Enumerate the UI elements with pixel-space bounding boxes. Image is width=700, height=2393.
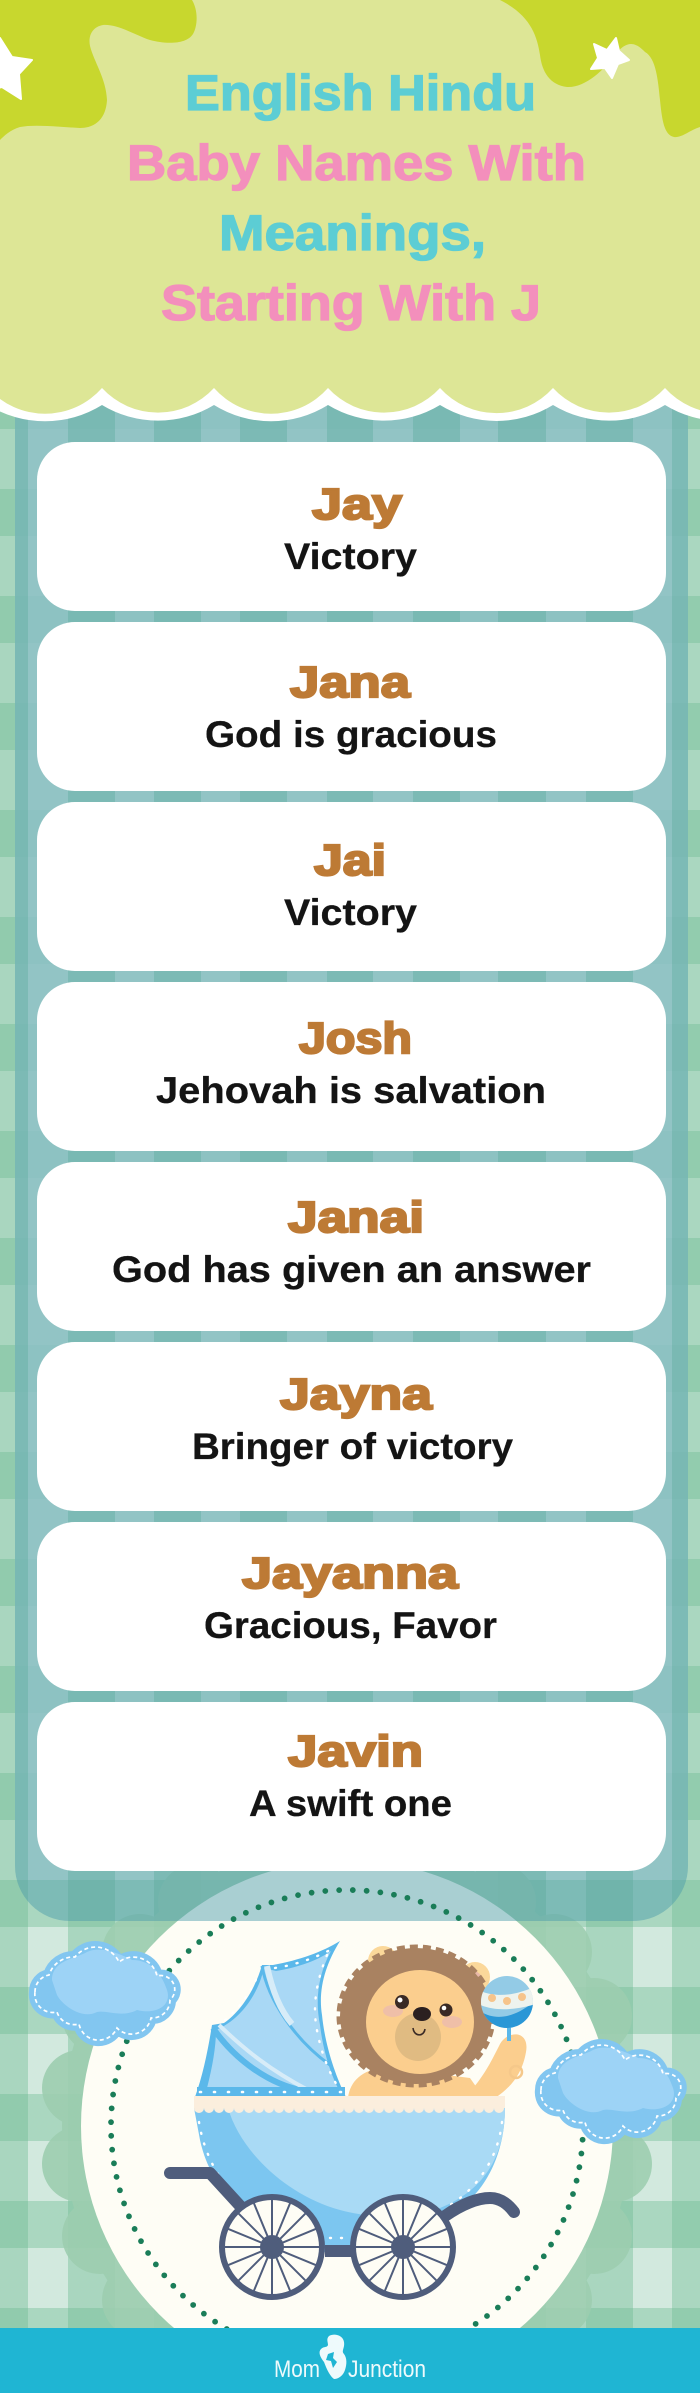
title: Baby Names With — [127, 135, 586, 191]
pram canopy — [195, 1941, 346, 2097]
header — [0, 0, 700, 421]
lion face — [366, 1970, 474, 2074]
header white scalloped edge — [0, 300, 700, 421]
lion mane — [340, 1948, 492, 2084]
right green blob — [500, 0, 700, 137]
title: Starting With J — [161, 275, 541, 331]
MomJunction logo — [274, 2335, 426, 2383]
card: Jayna: Jayna — [280, 1370, 433, 1419]
card: Jana — [37, 622, 666, 791]
card: Jayanna: Gracious, Favor — [204, 1605, 497, 1646]
logo wordmark: Junction — [348, 2356, 426, 2383]
footer band — [0, 2328, 700, 2393]
icon: left star — [0, 38, 32, 99]
logo wordmark — [274, 2356, 426, 2383]
card: Janai — [37, 1162, 666, 1331]
lion nose — [413, 2007, 431, 2021]
title: Meanings, — [219, 205, 486, 261]
icon: right cloud — [541, 2045, 681, 2138]
lion arm — [462, 2034, 526, 2098]
lion muzzle — [395, 2013, 441, 2061]
card: Jayna: Bringer of victory — [192, 1426, 513, 1467]
rattle ring — [510, 2066, 522, 2078]
card: Jai: Victory — [284, 892, 417, 933]
pram handles and axle — [170, 2173, 514, 2251]
title: English Hindu — [185, 65, 536, 121]
lion mouth — [413, 2028, 425, 2035]
pram trim — [194, 2096, 505, 2113]
card: Jana: God is gracious — [205, 714, 497, 755]
card: Javin: Javin — [288, 1727, 423, 1776]
card: Jana: Jana — [290, 658, 411, 707]
lion ears — [368, 1946, 398, 1976]
logo wordmark: Mom — [274, 2356, 320, 2383]
icon: right star — [591, 38, 629, 78]
card: Janai: God has given an answer — [112, 1249, 591, 1290]
left green blob — [0, 0, 197, 140]
dotted ring — [111, 1890, 583, 2362]
card: Jayanna: Jayanna — [242, 1549, 459, 1598]
pram body — [194, 2108, 505, 2252]
lion body — [348, 2068, 484, 2098]
card: Javin — [37, 1702, 666, 1871]
title — [127, 65, 586, 331]
translucent teal panel — [15, 300, 688, 1921]
card: Jai: Jai — [314, 836, 386, 885]
card: Jayanna — [37, 1522, 666, 1691]
card: Janai: Janai — [288, 1193, 424, 1242]
lion eyes — [395, 1995, 409, 2009]
logo mom figure and heart — [320, 2335, 346, 2379]
rattle — [481, 1976, 533, 2041]
card: Josh: Josh — [299, 1014, 412, 1063]
icon: left cloud — [35, 1947, 175, 2040]
pram stitching — [199, 2122, 502, 2238]
icon: lion in pram — [170, 1941, 536, 2297]
left wheel — [222, 2197, 322, 2297]
card: Josh — [37, 982, 666, 1151]
scalloped green shape behind circle — [42, 1818, 652, 2393]
right wheel — [353, 2197, 453, 2297]
card: Jay — [37, 442, 666, 611]
card: Javin: A swift one — [249, 1783, 452, 1824]
card: Josh: Jehovah is salvation — [156, 1070, 546, 1111]
header background — [0, 0, 700, 414]
card: Jayna — [37, 1342, 666, 1511]
ivory circle — [81, 1860, 613, 2392]
card: Jay: Victory — [284, 536, 417, 577]
card: Jai — [37, 802, 666, 971]
card: Jay: Jay — [312, 480, 403, 529]
